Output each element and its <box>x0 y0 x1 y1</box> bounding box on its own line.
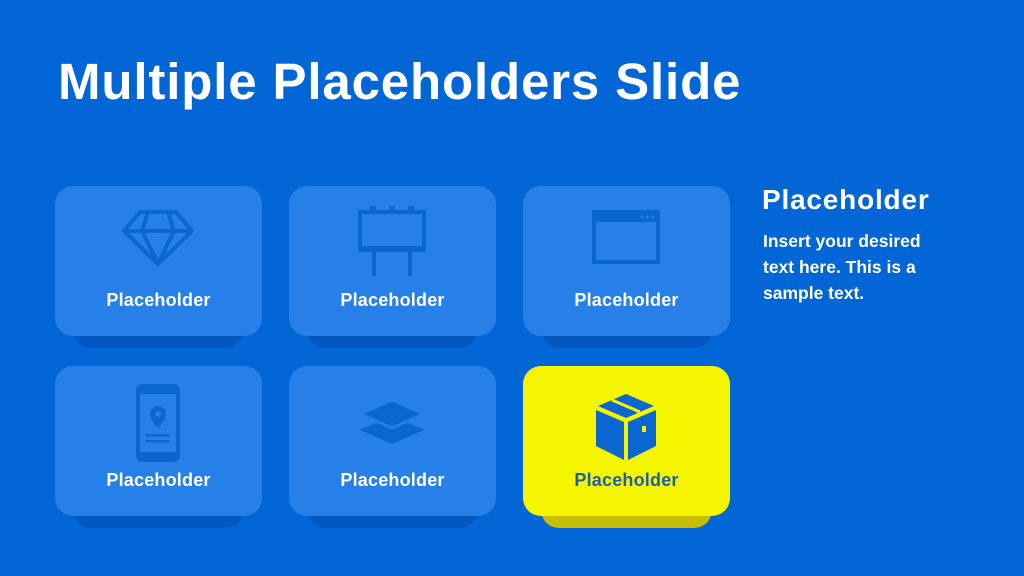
card: layers <box>289 366 496 528</box>
card: phone: Placeholder <box>106 470 211 490</box>
title: Multiple Placeholders Slide <box>58 53 741 110</box>
side text: Insert your desired text here. This is a sample text. <box>763 231 921 303</box>
card: billboard <box>289 186 496 348</box>
card: window: Placeholder <box>574 290 679 310</box>
card: box highlighted: Placeholder <box>574 470 679 490</box>
icon: window <box>592 210 660 264</box>
card: layers: Placeholder <box>340 470 445 490</box>
side heading: Placeholder <box>762 184 930 215</box>
icon: box <box>596 394 656 460</box>
icon: layers <box>360 402 424 444</box>
icon: phone map <box>136 384 180 462</box>
card: box highlighted <box>523 366 730 528</box>
card: phone <box>55 366 262 528</box>
card: billboard: Placeholder <box>340 290 445 310</box>
card: diamond <box>55 186 262 348</box>
icon: billboard <box>358 206 426 276</box>
card: diamond: Placeholder <box>106 290 211 310</box>
icon: diamond <box>122 210 194 266</box>
card: window <box>523 186 730 348</box>
